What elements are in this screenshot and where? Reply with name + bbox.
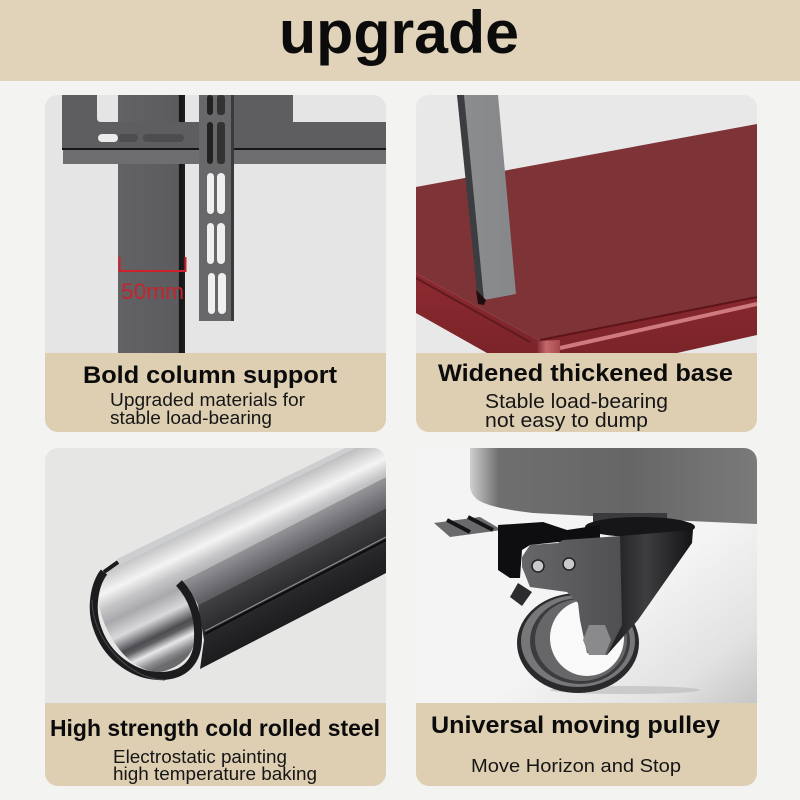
caption: universal moving pulley: Universal moving pulley [431,712,721,739]
dimension marker: 50mm [120,257,186,304]
illustration: column and bracket [62,95,386,353]
caption: bold column support [45,353,386,432]
panel: high strength cold rolled steel [45,448,386,786]
caption: high strength cold rolled steel: high temperature baking [113,764,317,784]
illustration: steel tube [92,448,386,680]
dimension marker: 50mm: 50mm [121,279,184,304]
title: upgrade [279,0,519,66]
caption: high strength cold rolled steel [45,703,386,786]
caption: bold column support: Bold column support [83,362,337,389]
caption: widened thickened base [416,353,757,432]
upper base plate [470,448,757,524]
caption: widened thickened base: Stable load-bearing [485,391,668,413]
caption: high strength cold rolled steel: High strength cold rolled steel [50,715,380,741]
panel: bold column support [45,95,386,432]
brake pedal [434,517,502,537]
panel: universal moving pulley [416,448,757,786]
caption: widened thickened base: Widened thickened base [438,360,733,387]
wheel [517,593,639,693]
caption: universal moving pulley: Move Horizon and Stop [471,756,681,776]
illustration: red base and post [416,95,757,353]
panel: widened thickened base [416,95,757,432]
caption: universal moving pulley [416,703,757,786]
caption: bold column support: stable load-bearing [110,408,272,428]
illustration: caster wheel [434,448,757,694]
caption: high strength cold rolled steel: Electrostatic painting [113,747,287,767]
header banner [0,0,800,81]
caption: bold column support: Upgraded materials for [110,390,305,410]
caption: widened thickened base: not easy to dump [485,410,648,432]
bracket [607,530,693,655]
